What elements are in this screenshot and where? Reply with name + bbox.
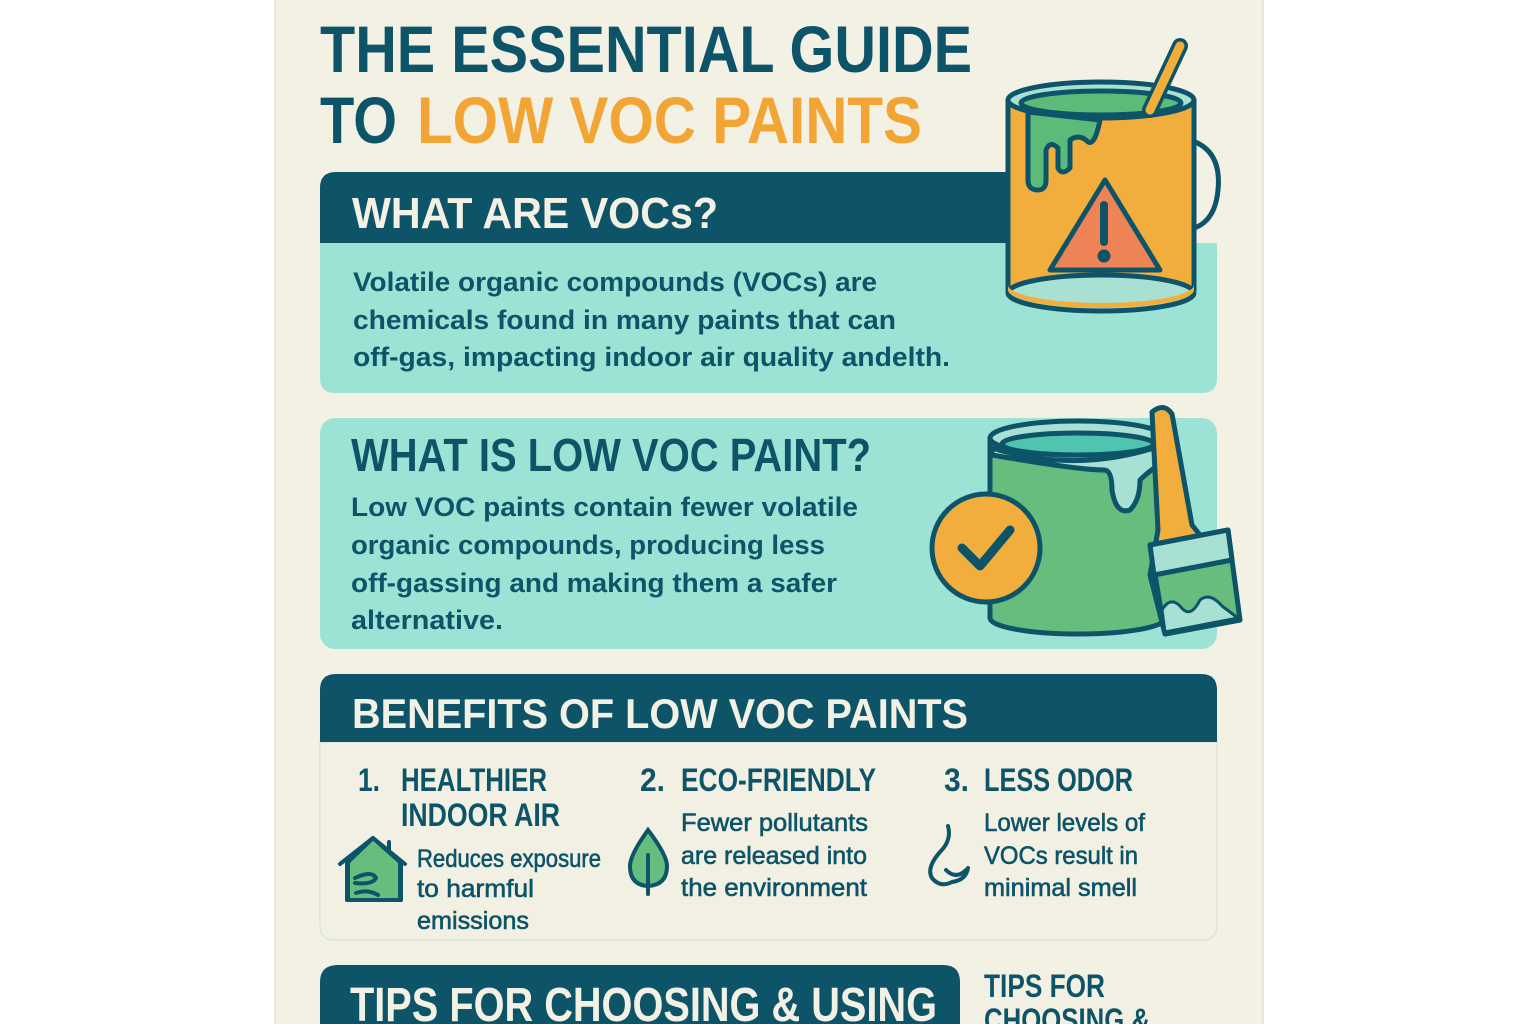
benefit 1: healthier indoor air xyxy=(340,762,601,935)
benefit 1: healthier indoor air: INDOOR AIR xyxy=(401,797,560,833)
side heading: tips: TIPS FOR xyxy=(984,968,1105,1004)
benefit 1: healthier indoor air: 1. xyxy=(358,762,380,798)
text block: VOC definition: chemicals found in many paints that can xyxy=(353,305,896,335)
benefit 3: less odor: minimal smell xyxy=(984,874,1137,902)
benefit 3: less odor: Lower levels of xyxy=(984,809,1145,837)
benefit 2: eco-friendly: are released into xyxy=(681,842,867,870)
benefit 3: less odor: VOCs result in xyxy=(984,842,1138,870)
benefit 1: healthier indoor air: HEALTHIER xyxy=(401,762,547,798)
benefit 1: healthier indoor air: to harmful xyxy=(417,875,534,903)
text block: VOC definition: Volatile organic compounds (VOCs) are xyxy=(353,267,877,297)
title: TO xyxy=(320,83,397,157)
title xyxy=(320,12,972,157)
poster background xyxy=(275,0,1263,1024)
text block: low VOC definition: off-gassing and making them a safer xyxy=(351,568,837,598)
icon: nose xyxy=(930,826,968,884)
benefit 2: eco-friendly xyxy=(630,762,876,902)
icon: orange paint can with warning xyxy=(1008,46,1218,311)
benefit 2: eco-friendly: ECO-FRIENDLY xyxy=(681,762,876,798)
title: LOW VOC PAINTS xyxy=(417,83,922,157)
title: THE ESSENTIAL GUIDE xyxy=(320,12,972,86)
text block: low VOC definition: Low VOC paints contain fewer volatile xyxy=(351,492,858,522)
text block: VOC definition: off-gas, impacting indoor air quality andelth. xyxy=(353,342,950,372)
side heading: tips xyxy=(984,968,1150,1024)
heading: benefits: BENEFITS OF LOW VOC PAINTS xyxy=(352,690,968,737)
icon: house xyxy=(340,838,405,900)
icon: leaf xyxy=(630,830,667,894)
text block: low VOC definition: alternative. xyxy=(351,605,503,635)
panel: benefits xyxy=(320,674,1217,940)
benefit 3: less odor: LESS ODOR xyxy=(984,762,1133,798)
heading: what is low VOC paint: WHAT IS LOW VOC PAINT? xyxy=(351,429,871,481)
benefit 3: less odor xyxy=(930,762,1145,902)
panel: what are VOCs xyxy=(320,172,1217,393)
text block: low VOC definition xyxy=(351,492,858,635)
benefit 3: less odor: 3. xyxy=(944,762,969,798)
benefit 2: eco-friendly: 2. xyxy=(640,762,665,798)
panel: tips header xyxy=(320,965,960,1024)
panel: what is low VOC paint xyxy=(320,418,1217,649)
benefit 1: healthier indoor air: Reduces exposure xyxy=(417,845,601,873)
benefit 1: healthier indoor air: emissions xyxy=(417,907,529,935)
text block: VOC definition xyxy=(353,267,950,372)
text block: low VOC definition: organic compounds, producing less xyxy=(351,530,825,560)
heading: what are VOCs: WHAT ARE VOCs? xyxy=(352,189,718,238)
icon: green paint can with check and brush xyxy=(932,407,1240,634)
benefit 2: eco-friendly: the environment xyxy=(681,874,867,902)
benefit 2: eco-friendly: Fewer pollutants xyxy=(681,809,868,837)
